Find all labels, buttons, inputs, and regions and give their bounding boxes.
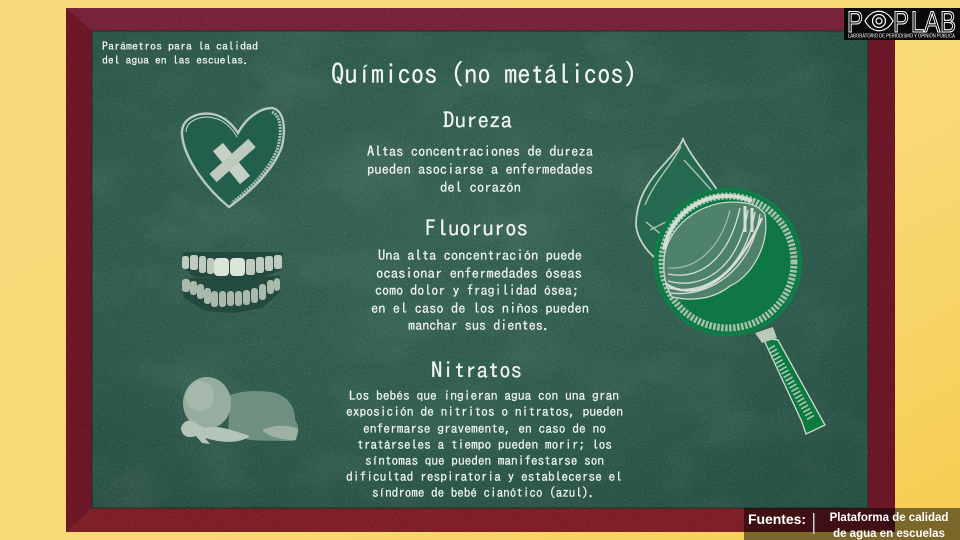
- note: water quality parameters: del agua en las escuelas.: [102, 55, 249, 66]
- text: Nitratos: tratárseles a tiempo pueden morir; los: [357, 438, 612, 451]
- icon: sleeping baby: [181, 377, 298, 444]
- source name: [830, 512, 948, 540]
- text: Dureza: del corazón: [440, 180, 521, 194]
- icon: water drop and magnifying glass: [636, 139, 825, 434]
- text: Nitratos: dificultad respiratoria y establecerse el: [346, 470, 622, 483]
- water drop: [636, 139, 718, 257]
- note: water quality parameters: [102, 41, 258, 66]
- text: Fluoruros: en el caso de los niños pueden: [371, 301, 589, 315]
- drop seen through the lens: [664, 202, 766, 299]
- source name: Plataforma de calidad: [830, 512, 948, 524]
- text: Nitratos: Los bebés que ingieran agua con una gran: [349, 389, 619, 402]
- source bar: [744, 508, 960, 540]
- magnifying glass lens: [655, 189, 801, 335]
- text: Nitratos: síndrome de bebé cianótico (azul).: [372, 486, 595, 499]
- text: Fluoruros: como dolor y fragilidad ósea;: [375, 283, 579, 297]
- green board surface: [92, 31, 868, 508]
- text: Fluoruros: ocasionar enfermedades óseas: [376, 266, 582, 280]
- logo: POP LAB: [844, 6, 960, 40]
- icon: heart with bandage: [182, 108, 284, 207]
- logo wordmark: [847, 6, 956, 39]
- text: Nitratos: enfermarse gravemente, en caso de no: [363, 422, 606, 435]
- heading: Dureza: Dureza: [443, 109, 512, 131]
- source label: Fuentes:: [748, 511, 806, 527]
- text: Nitratos: exposición de nitritos o nitratos, pueden: [346, 405, 623, 418]
- source name: de agua en escuelas: [833, 528, 945, 540]
- logo eye: [865, 11, 893, 31]
- text: Dureza: [367, 144, 593, 194]
- text: Fluoruros: [371, 248, 589, 332]
- heading: Nitratos: Nitratos: [431, 359, 522, 381]
- logo wordmark: P: [847, 6, 863, 39]
- logo wordmark: P: [893, 6, 909, 39]
- magnifying glass handle: [763, 338, 825, 434]
- text: Fluoruros: Una alta concentración puede: [378, 248, 582, 262]
- text: Dureza: pueden asociarse a enfermedades: [367, 162, 593, 176]
- text: Fluoruros: manchar sus dientes.: [408, 318, 550, 332]
- note: water quality parameters: Parámetros para la calidad: [102, 41, 258, 52]
- text: Nitratos: síntomas que pueden manifestarse son: [365, 454, 604, 467]
- title: Químicos (no metálicos): [331, 61, 637, 88]
- text: Nitratos: [346, 389, 623, 499]
- text: Dureza: Altas concentraciones de dureza: [367, 144, 593, 158]
- heading: Fluoruros: Fluoruros: [425, 217, 528, 239]
- icon: teeth: [181, 252, 283, 313]
